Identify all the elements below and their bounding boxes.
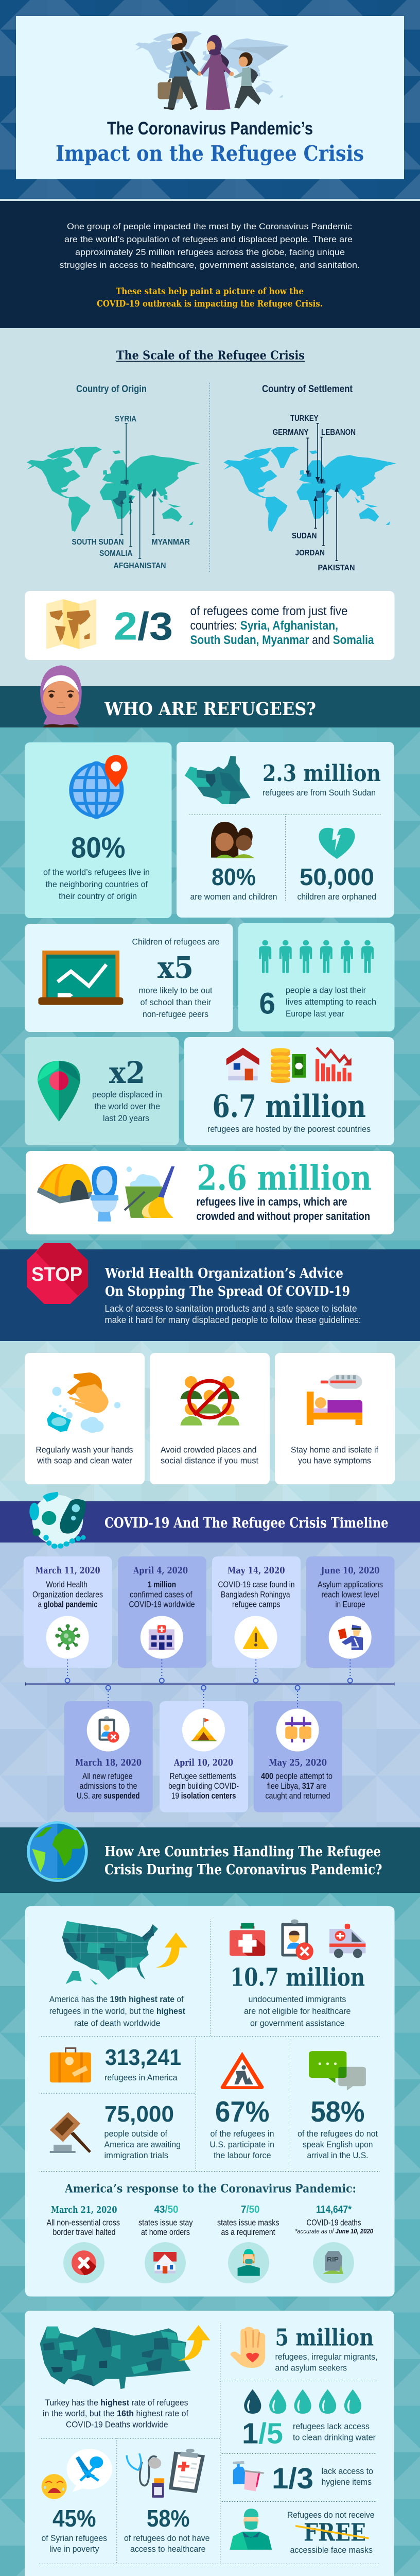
description xyxy=(261,1771,332,1801)
panel: introduction xyxy=(0,201,420,328)
icon: toilet xyxy=(91,1166,118,1222)
stat description xyxy=(244,1994,351,2028)
stat: refugees in America xyxy=(104,2045,181,2082)
stat: English: arrival in the U.S. xyxy=(307,2150,369,2160)
panel: title card xyxy=(16,16,404,179)
panel: advice background xyxy=(0,1341,420,1501)
icon: up arrow xyxy=(156,1933,187,1968)
icon: settlement tent in circle xyxy=(182,1708,225,1752)
intro paragraph xyxy=(60,222,360,270)
stat description: the neighboring countries of xyxy=(45,879,148,889)
icon: earth xyxy=(27,1821,88,1882)
response: stay at home xyxy=(138,2204,193,2283)
icon: medical kit xyxy=(230,1923,265,1956)
panel: scale of the refugee crisis xyxy=(0,328,420,686)
response: masks: as a requirement xyxy=(221,2227,275,2237)
description: 400 people attempt to xyxy=(261,1771,332,1781)
description: Asylum applications xyxy=(318,1580,383,1589)
icon: soap and towel xyxy=(233,2461,264,2492)
title line 1: The Coronavirus Pandemic’s xyxy=(107,118,313,139)
card: South Sudan xyxy=(177,742,394,918)
stat text: more likely to be out xyxy=(139,986,213,995)
icon: six people xyxy=(259,940,374,973)
map labels: origin xyxy=(72,415,190,570)
stat: orphaned xyxy=(297,863,376,902)
stat description xyxy=(92,1090,162,1123)
description: caught and returned xyxy=(266,1791,330,1801)
icon: house xyxy=(226,1048,259,1080)
stat description: or government assistance xyxy=(250,2019,345,2028)
panel: two thirds stat xyxy=(25,591,394,660)
card: lives lost xyxy=(238,923,394,1031)
stat: labour force: U.S. participate in xyxy=(210,2140,274,2149)
description xyxy=(32,1580,103,1609)
icon: rejected form in circle xyxy=(87,1708,130,1752)
world map: origin countries xyxy=(27,423,200,558)
stat description: refugees live in camps, which are xyxy=(197,1195,347,1208)
card: 80 percent neighbouring countries xyxy=(25,742,172,918)
icon: falling bar chart xyxy=(316,1048,352,1081)
text: America rate: America has the 19th highest rate of xyxy=(49,1994,184,2004)
stat: 5 million xyxy=(275,2324,378,2373)
date: May 25, 2020 xyxy=(269,1757,327,1768)
text: America rate: refugees in the world, but the highest xyxy=(49,2006,185,2016)
world map: settlement countries xyxy=(224,423,396,561)
icon: woman in hijab xyxy=(40,665,82,727)
stat: English: speak English upon xyxy=(303,2140,373,2149)
icon: no crowds xyxy=(180,1376,239,1426)
icon: workers sign xyxy=(221,2052,264,2089)
stat: labour force: the labour force xyxy=(214,2150,271,2160)
icon: doctor with mask xyxy=(230,2509,272,2550)
card: displaced xyxy=(25,1037,179,1145)
stat: labour force: of the refugees in xyxy=(210,2129,274,2139)
stat description: Europe last year xyxy=(286,1009,344,1019)
text: America rate: rate of death worldwide xyxy=(74,2019,161,2028)
response: border xyxy=(46,2205,120,2283)
stat: clean water: to clean drinking water xyxy=(293,2433,376,2442)
stat description: crowded and without proper sanitation xyxy=(197,1210,370,1223)
stat description: are not eligible for healthcare xyxy=(244,2006,351,2016)
stat: English: of the refugees do not xyxy=(297,2129,378,2139)
stat: poverty: 45% xyxy=(52,2505,96,2532)
description: confirmed cases of xyxy=(130,1590,192,1599)
card: camps xyxy=(26,1151,394,1234)
stat: 80% xyxy=(71,832,126,865)
timeline card: June 10 xyxy=(306,1556,394,1678)
stat: 2.3 million xyxy=(262,760,381,787)
panel: who are refugees background xyxy=(0,727,420,1249)
description: flee Libya, 317 are xyxy=(267,1781,326,1791)
response: deaths: 114,647* xyxy=(316,2204,352,2215)
banner: WHO advice xyxy=(0,1243,420,1341)
response: border: All non-essential cross xyxy=(46,2217,120,2228)
icon: folded map xyxy=(46,599,96,649)
description: COVID-19 worldwide xyxy=(129,1599,195,1609)
description: U.S. are suspended xyxy=(77,1791,140,1801)
map: Turkey xyxy=(40,2327,191,2389)
icon: hospital in circle xyxy=(141,1616,183,1659)
timeline card: March 11 xyxy=(24,1556,112,1678)
date: April 4, 2020 xyxy=(133,1565,188,1576)
description: reach lowest level xyxy=(321,1590,379,1599)
heading: WHO ARE REFUGEES? xyxy=(104,699,316,720)
stat description: people a day lost their xyxy=(286,985,366,995)
card: wash hands xyxy=(25,1353,145,1484)
caption: you have symptoms xyxy=(298,1456,371,1465)
stat: face masks: FREE xyxy=(304,2518,366,2547)
stat text: Children of refugees are xyxy=(132,937,219,947)
stat: undocumented immigrants: 10.7 million xyxy=(231,1963,365,1992)
map: South Sudan xyxy=(185,756,251,804)
stat description: last 20 years xyxy=(103,1113,149,1123)
stat: labour force: 67% xyxy=(215,2095,270,2128)
stat: English: 58% xyxy=(311,2095,364,2128)
text: Turkey rate: COVID-19 Deaths worldwide xyxy=(66,2419,168,2430)
map labels: settlement: TURKEY xyxy=(290,414,319,423)
stat: refugees in America: refugees in America xyxy=(104,2073,178,2082)
stat: awaiting trials: America are awaiting xyxy=(104,2140,181,2149)
stat: healthcare access: of refugees do not have xyxy=(124,2533,210,2543)
stat: face masks: accessible face masks xyxy=(290,2545,373,2555)
stat description: countries: Syria, Afghanistan, xyxy=(190,619,338,633)
stat: poverty xyxy=(41,2505,107,2554)
icon: stop sign: STOP xyxy=(31,1264,82,1285)
timeline card: May 14 xyxy=(212,1556,301,1678)
stat: x2 xyxy=(109,1055,145,1090)
description xyxy=(168,1771,239,1801)
heading xyxy=(104,1844,382,1878)
map labels: settlement: LEBANON xyxy=(321,428,356,437)
text: Turkey rate xyxy=(43,2398,188,2430)
map labels: origin: SOMALIA xyxy=(99,549,133,558)
response: masks: states issue masks xyxy=(217,2217,279,2228)
card: Turkey xyxy=(25,2311,394,2576)
map labels: settlement: GERMANY xyxy=(273,428,309,437)
stat: face masks xyxy=(287,2510,375,2555)
caption xyxy=(161,1445,258,1465)
stat: awaiting trials: people outside of xyxy=(104,2129,167,2139)
stat: poverty: live in poverty xyxy=(49,2544,99,2554)
stat description xyxy=(43,868,150,901)
stat description: lives attempting to reach xyxy=(286,997,376,1007)
stat: clean water: 1/5 xyxy=(242,2417,283,2450)
map labels: origin: MYANMAR xyxy=(151,538,190,547)
section heading: The Scale of the Refugee Crisis xyxy=(116,348,305,363)
icon: globe with pin xyxy=(69,755,128,818)
icon: ambulance xyxy=(329,1924,365,1958)
map labels: origin: SOUTH SUDAN xyxy=(72,538,124,547)
timeline axis xyxy=(25,1679,394,1690)
response: deaths: *accurate as of June 10, 2020 xyxy=(295,2227,374,2235)
date: May 14, 2020 xyxy=(227,1565,285,1576)
heading: On Stopping The Spread Of COVID-19 xyxy=(105,1284,350,1299)
stat: 80 percent: 80% xyxy=(212,863,256,890)
stat description: their country of origin xyxy=(59,891,137,901)
icon: washing hands xyxy=(47,1372,120,1433)
banner: who are refugees xyxy=(0,665,420,727)
stat: orphaned: 50,000 xyxy=(300,863,374,890)
heading: World Health Organization’s Advice xyxy=(104,1266,343,1281)
icon: location pin xyxy=(38,1061,80,1122)
icon: women xyxy=(211,822,254,858)
map labels: settlement: PAKISTAN xyxy=(318,564,355,572)
stat: English xyxy=(297,2095,378,2160)
subheading: make it hard for many displaced people to follow these guidelines: xyxy=(105,1315,361,1325)
description: Organization declares xyxy=(32,1590,103,1599)
card: America xyxy=(25,1906,394,2297)
icon: bucket and broom xyxy=(125,1166,174,1218)
map: United States xyxy=(62,1921,158,1985)
description xyxy=(77,1771,140,1801)
stat: 6.7 million xyxy=(212,1089,366,1125)
heading: country of settlement: Country of Settlement xyxy=(262,384,353,395)
stat: 6 xyxy=(259,987,275,1020)
response: stay at home: at home orders xyxy=(141,2227,190,2237)
heading: America's response: America’s response to the Coronavirus Pandemic: xyxy=(64,2182,356,2196)
icon: gavel xyxy=(50,2112,91,2153)
description xyxy=(218,1580,294,1609)
date: March 18, 2020 xyxy=(75,1757,142,1768)
icon: coins and banknote xyxy=(271,1048,306,1083)
icon: rejected clipboard xyxy=(281,1919,313,1960)
response: border: border travel halted xyxy=(52,2227,115,2237)
icon: up arrow xyxy=(178,2325,211,2361)
intro paragraph: One group of people impacted the most by the Coronavirus Pandemic xyxy=(67,222,353,231)
banner: timeline xyxy=(0,1492,420,1549)
response: deaths: COVID-19 deaths xyxy=(307,2217,361,2228)
stat description: people displaced in xyxy=(92,1090,162,1099)
icon: water drops xyxy=(244,2389,361,2414)
panel: timeline background xyxy=(0,1543,420,1827)
stat: 80 percent: are women and children xyxy=(190,892,277,902)
description: in Europe xyxy=(336,1599,365,1609)
stat description: refugees are from South Sudan xyxy=(262,788,376,798)
stat: hygiene: hygiene items xyxy=(321,2477,372,2487)
timeline card: May 25 xyxy=(254,1691,342,1812)
icon: hungry emoji with speech bubble xyxy=(42,2449,112,2499)
stat text: of school than their xyxy=(140,997,211,1007)
date: June 10, 2020 xyxy=(320,1565,380,1576)
panel: countries background xyxy=(0,1893,420,2576)
stat: clean water: refugees lack access xyxy=(293,2421,370,2431)
description: All new refugee xyxy=(82,1771,133,1781)
description: begin building COVID- xyxy=(168,1781,239,1791)
illustration: refugee family walking over world map xyxy=(135,31,289,110)
stat description xyxy=(190,604,374,647)
map labels: settlement: SUDAN xyxy=(292,532,317,540)
yellow call to attention: COVID-19 outbreak is impacting the Refugee Crisis. xyxy=(97,299,323,309)
banner: how countries are handling the crisis xyxy=(0,1821,420,1893)
icon: warning in circle xyxy=(235,1616,277,1659)
description: admissions to the xyxy=(79,1781,137,1791)
stat: healthcare access xyxy=(124,2505,210,2554)
icon: tent xyxy=(37,1164,93,1204)
stat text: non-refugee peers xyxy=(143,1009,208,1019)
date: April 10, 2020 xyxy=(173,1757,233,1768)
response: masks xyxy=(217,2204,279,2283)
stat: 2/3: 2/3 xyxy=(114,605,173,648)
stat: awaiting trials xyxy=(104,2102,181,2160)
description: COVID-19 case found in xyxy=(218,1580,294,1589)
icon: border officer in circle xyxy=(329,1616,372,1659)
title line 2: Impact on the Refugee Crisis xyxy=(56,141,364,166)
header background xyxy=(0,0,420,199)
card: avoid crowds xyxy=(150,1353,270,1484)
intro paragraph: struggles in access to healthcare, government assistance, and sanitation. xyxy=(60,260,360,270)
map labels: origin: SYRIA xyxy=(115,415,136,423)
card: stay home xyxy=(275,1353,395,1484)
caption: Stay home and isolate if xyxy=(291,1445,378,1455)
stat description: of the world’s refugees live in xyxy=(43,868,150,877)
yellow call to attention: These stats help paint a picture of how the xyxy=(116,286,304,296)
yellow call to attention xyxy=(97,286,323,309)
description: Bangladesh Rohingya xyxy=(221,1590,290,1599)
stat: awaiting trials: immigration trials xyxy=(104,2150,168,2160)
stat: 2.6 million xyxy=(197,1158,372,1198)
stat: 5 million: 5 million xyxy=(275,2324,374,2351)
icon: thermometer and bed xyxy=(307,1375,362,1425)
heading xyxy=(104,1266,350,1299)
stat text: x5 xyxy=(157,950,194,985)
caption: Avoid crowded places and xyxy=(161,1445,256,1455)
stat: healthcare access: 58% xyxy=(147,2505,189,2532)
date: March 11, 2020 xyxy=(35,1565,100,1576)
heading: country of origin: Country of Origin xyxy=(76,384,147,395)
icon: chalkboard xyxy=(38,951,123,1005)
description: refugee camps xyxy=(232,1599,280,1609)
card: poorest countries xyxy=(184,1037,394,1145)
stat description: undocumented immigrants xyxy=(248,1994,346,2004)
icon: broken heart xyxy=(319,828,355,859)
text: Turkey rate: Turkey has the highest rate of refugees xyxy=(45,2398,188,2408)
stat: 80 percent xyxy=(190,863,277,902)
stat text xyxy=(132,937,219,1019)
stat description xyxy=(197,1195,370,1223)
timeline card: April 10 xyxy=(160,1691,248,1812)
intro paragraph: approximately 25 million refugees across the globe, facing unique xyxy=(75,247,345,257)
stat description: the world over the xyxy=(95,1101,160,1111)
icon: stop sign xyxy=(27,1243,88,1304)
caption: with soap and clean water xyxy=(37,1456,132,1465)
intro paragraph: are the world’s population of refugees and displaced people. There are xyxy=(64,234,353,244)
map labels: settlement: JORDAN xyxy=(295,549,325,557)
stat: 5 million: and asylum seekers xyxy=(275,2363,347,2373)
stat description: refugees are hosted by the poorest countries xyxy=(207,1124,371,1134)
stat: face masks: Refugees do not receive xyxy=(287,2510,375,2520)
caption: social distance if you must xyxy=(161,1456,258,1465)
icon: hand with heart xyxy=(231,2327,265,2368)
stat: 5 million: refugees, irregular migrants, xyxy=(275,2352,378,2362)
text: Turkey rate: in the world, but the 16th highest rate of xyxy=(43,2409,188,2418)
description: 1 million xyxy=(148,1580,176,1589)
timeline card: April 4 xyxy=(118,1556,206,1678)
icon: virus in circle xyxy=(46,1616,89,1659)
caption: Regularly wash your hands xyxy=(36,1445,133,1455)
response: border: March 21, 2020 xyxy=(51,2205,117,2215)
description: 19 isolation centers xyxy=(171,1791,236,1801)
response: deaths: RIP xyxy=(327,2256,339,2263)
card: out of school xyxy=(25,924,233,1032)
stat: poverty: of Syrian refugees xyxy=(41,2533,107,2543)
timeline card: March 18 xyxy=(64,1691,153,1812)
caption xyxy=(36,1445,133,1465)
stat: healthcare access: access to healthcare xyxy=(130,2544,206,2554)
map labels: settlement xyxy=(273,414,356,572)
caption xyxy=(291,1445,378,1465)
icon: stethoscope, medicine and clipboard xyxy=(127,2449,205,2498)
description xyxy=(318,1580,383,1609)
stat description: South Sudan, Myanmar and Somalia xyxy=(190,633,374,647)
stat: hygiene xyxy=(272,2462,373,2495)
response: stay at home: 43/50 xyxy=(154,2204,178,2215)
map labels: origin: AFGHANISTAN xyxy=(113,562,166,570)
description: Refugee settlements xyxy=(170,1771,236,1781)
description: a global pandemic xyxy=(38,1599,98,1609)
text: America rate xyxy=(49,1994,185,2028)
icon: speech bubbles xyxy=(309,2051,366,2090)
response: masks: 7/50 xyxy=(241,2204,259,2215)
response: deaths xyxy=(295,2204,374,2283)
stat: hygiene: 1/3 xyxy=(272,2462,313,2495)
stat: labour force xyxy=(210,2095,274,2160)
response: stay at home: states issue stay xyxy=(138,2217,193,2228)
icon: hands at fence in circle xyxy=(276,1708,319,1752)
stat: hygiene: lack access to xyxy=(321,2466,373,2476)
stat: awaiting trials: 75,000 xyxy=(104,2102,174,2127)
icon: virus cell xyxy=(29,1492,86,1549)
description: World Health xyxy=(46,1580,87,1589)
stat description xyxy=(286,985,376,1019)
stat: refugees in America: 313,241 xyxy=(105,2045,181,2070)
subheading: Lack of access to sanitation products and a safe space to isolate xyxy=(105,1303,357,1314)
icon: suitcase xyxy=(50,2048,91,2082)
stat description: of refugees come from just five xyxy=(190,604,348,618)
stat: orphaned: children are orphaned xyxy=(297,892,376,902)
stat: clean water xyxy=(242,2417,376,2450)
subheading xyxy=(105,1303,361,1325)
description xyxy=(129,1580,195,1609)
